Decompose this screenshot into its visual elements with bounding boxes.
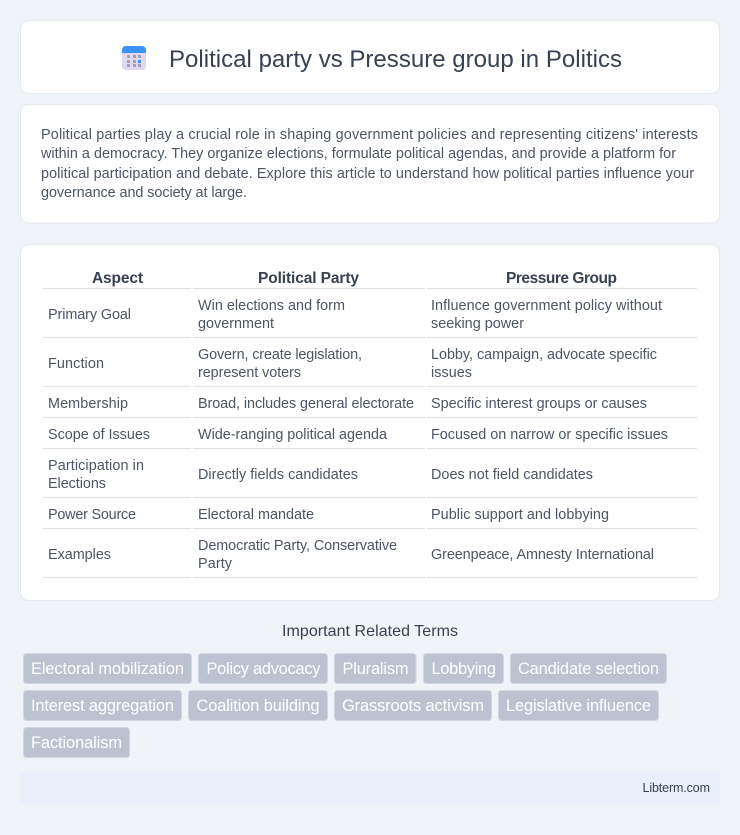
table header: Aspect bbox=[92, 270, 143, 287]
intro text: political participation and debate. Explore this article to understand how political parties influence your bbox=[41, 166, 694, 182]
tag: legislative influence bbox=[498, 690, 658, 720]
row: function: Lobby, campaign, advocate specific bbox=[431, 347, 657, 363]
row: examples bbox=[48, 538, 654, 572]
heading: important related terms: Important Related Terms bbox=[282, 623, 458, 640]
intro text: within a democracy. They organize elections, formulate political agendas, and provide a platform for bbox=[40, 146, 676, 162]
tag: factionalism: Factionalism bbox=[31, 734, 122, 752]
intro text: governance and society at large. bbox=[41, 185, 247, 201]
tag: candidate selection: Candidate selection bbox=[518, 660, 659, 678]
row: scope of issues: Wide-ranging political agenda bbox=[198, 427, 387, 443]
icon: calendar bbox=[122, 46, 146, 70]
row: examples: Examples bbox=[48, 547, 111, 563]
title: Political party vs Pressure group in Politics bbox=[169, 46, 622, 73]
row: function: represent voters bbox=[198, 365, 301, 381]
intro text: Political parties play a crucial role in shaping government policies and representing citizens' interests bbox=[41, 127, 698, 143]
row: primary goal: Win elections and form bbox=[198, 298, 345, 314]
row: function: issues bbox=[431, 365, 472, 381]
row: examples: Democratic Party, Conservative bbox=[198, 538, 397, 554]
tag: pluralism: Pluralism bbox=[342, 660, 408, 678]
table header: Political Party bbox=[258, 270, 359, 287]
tag: interest aggregation bbox=[24, 690, 182, 720]
tag: electoral mobilization bbox=[24, 654, 192, 684]
row: function: Function bbox=[48, 356, 104, 372]
tag: legislative influence: Legislative influence bbox=[506, 697, 651, 715]
related terms tags bbox=[24, 654, 666, 758]
footer bbox=[20, 771, 720, 805]
row: examples: Party bbox=[198, 556, 233, 572]
footer: Libterm.com bbox=[642, 781, 710, 795]
row: membership: Broad, includes general electorate bbox=[198, 396, 414, 412]
tag: policy advocacy bbox=[198, 654, 328, 684]
tag: factionalism bbox=[24, 728, 130, 758]
tag: candidate selection bbox=[510, 654, 666, 684]
panel: introduction bbox=[20, 104, 720, 223]
tag: coalition building bbox=[188, 690, 328, 720]
row: power source: Power Source bbox=[48, 507, 136, 523]
tag: pluralism bbox=[334, 654, 416, 684]
intro text bbox=[40, 127, 698, 201]
row: membership: Specific interest groups or causes bbox=[431, 396, 647, 412]
table header: Pressure Group bbox=[506, 270, 617, 287]
row: examples: Greenpeace, Amnesty International bbox=[431, 547, 654, 563]
row: primary goal: Primary Goal bbox=[48, 307, 131, 323]
row: scope of issues bbox=[48, 427, 668, 443]
row: power source: Electoral mandate bbox=[198, 507, 314, 523]
row: participation in elections: Does not field candidates bbox=[431, 467, 593, 483]
row: primary goal: seeking power bbox=[431, 316, 524, 332]
row: power source bbox=[48, 507, 609, 523]
row: primary goal: government bbox=[198, 316, 274, 332]
row: membership bbox=[48, 396, 647, 412]
row: participation in elections: Participation in bbox=[48, 458, 144, 474]
tag: electoral mobilization: Electoral mobilization bbox=[31, 660, 184, 678]
tag: grassroots activism: Grassroots activism bbox=[342, 697, 484, 715]
row: scope of issues: Focused on narrow or specific issues bbox=[431, 427, 668, 443]
tag: interest aggregation: Interest aggregation bbox=[31, 697, 174, 715]
row: participation in elections bbox=[48, 458, 593, 492]
row: power source: Public support and lobbying bbox=[431, 507, 609, 523]
table header bbox=[92, 270, 617, 287]
row: participation in elections: Directly fields candidates bbox=[198, 467, 358, 483]
tag: lobbying: Lobbying bbox=[432, 660, 496, 678]
row: participation in elections: Elections bbox=[48, 476, 106, 492]
row: primary goal bbox=[48, 298, 662, 332]
row: membership: Membership bbox=[48, 396, 128, 412]
row: primary goal: Influence government policy without bbox=[431, 298, 662, 314]
panel: header bbox=[20, 20, 720, 94]
tag: coalition building: Coalition building bbox=[196, 697, 320, 715]
panel: comparison table bbox=[20, 244, 720, 600]
row: scope of issues: Scope of Issues bbox=[48, 427, 150, 443]
tag: lobbying bbox=[424, 654, 504, 684]
tag: policy advocacy: Policy advocacy bbox=[206, 660, 321, 678]
row: function: Govern, create legislation, bbox=[198, 347, 362, 363]
row: function bbox=[48, 347, 657, 381]
tag: grassroots activism bbox=[334, 690, 492, 720]
